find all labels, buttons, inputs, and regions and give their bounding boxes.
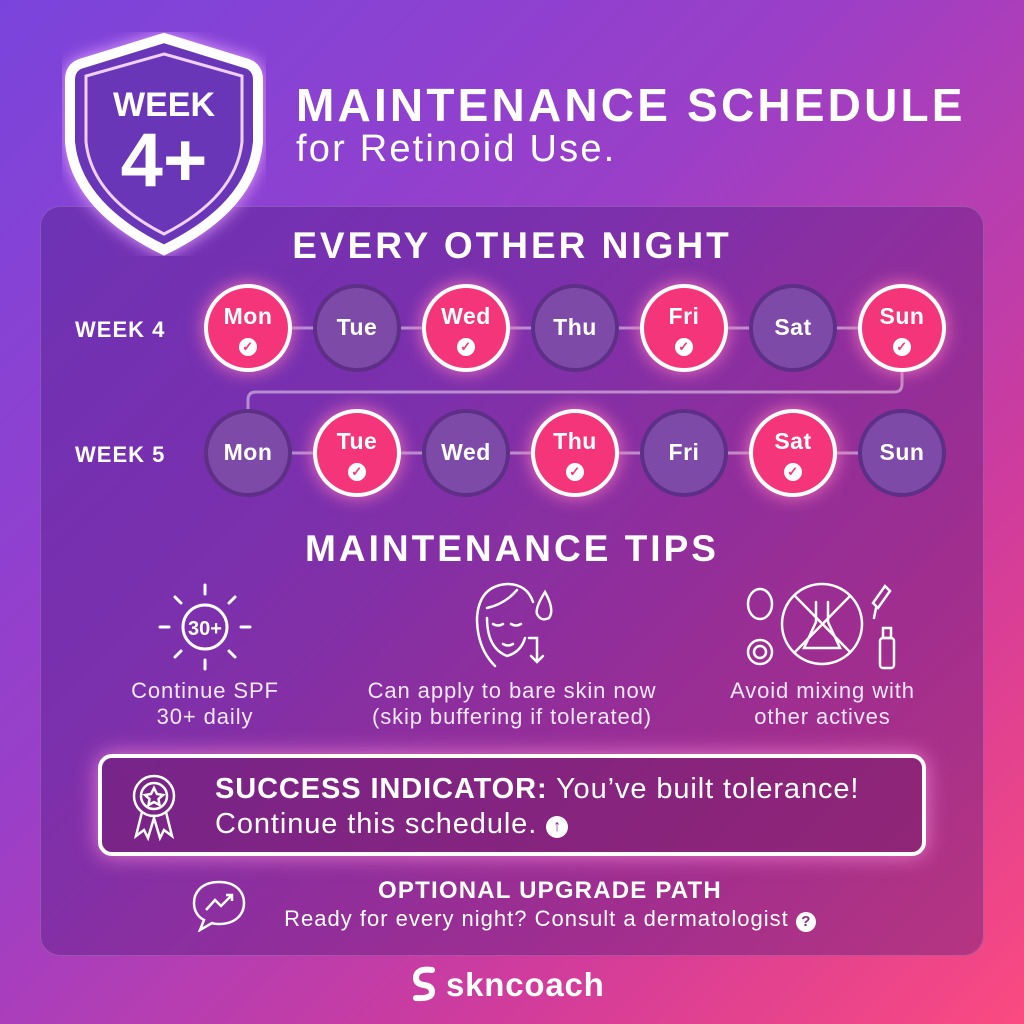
- week 4 row: ✓: [896, 339, 908, 354]
- success text: ↑: [553, 818, 561, 835]
- shield badge: 4+: [121, 118, 207, 203]
- tip text: avoid mixing: Avoid mixing with: [730, 678, 915, 703]
- week 4 row: WEEK 4: [75, 317, 165, 342]
- shield badge: WEEK: [113, 86, 215, 124]
- heading: maintenance tips: MAINTENANCE TIPS: [305, 528, 719, 569]
- week 5 row: Tue: [337, 428, 377, 454]
- week 4 row: ✓: [242, 339, 254, 354]
- success indicator box: [98, 754, 926, 856]
- tip text: bare skin: [368, 678, 656, 729]
- icon: no mixing: [746, 582, 896, 670]
- optional upgrade path text: [284, 877, 816, 932]
- tip text: spf: Continue SPF: [131, 678, 279, 703]
- success text: Continue this schedule.: [215, 808, 537, 840]
- shield badge: [62, 32, 266, 256]
- success text: SUCCESS INDICATOR: You’ve built tolerance!: [215, 773, 859, 805]
- tip text: avoid mixing: other actives: [754, 704, 891, 729]
- week 5 row: WEEK 5: [75, 442, 165, 467]
- week 4 row: Mon: [224, 303, 272, 329]
- icon: award ribbon: [132, 774, 176, 842]
- logo: skncoach: [446, 966, 605, 1003]
- week 4 row: ✓: [678, 339, 690, 354]
- main panel: [40, 206, 984, 956]
- week 4 row: Fri: [669, 303, 699, 329]
- week 4 row: Tue: [337, 314, 377, 340]
- heading: every other night: EVERY OTHER NIGHT: [292, 225, 732, 266]
- week 4 row: Sun: [880, 303, 924, 329]
- icon: chat trend: [192, 880, 246, 932]
- week 5 row: Sun: [880, 439, 924, 465]
- week 4 row: ✓: [460, 339, 472, 354]
- week 5 row: [75, 398, 946, 508]
- week 5 row: ✓: [569, 464, 581, 479]
- week 5 row: Wed: [441, 439, 491, 465]
- tip text: spf: [131, 678, 279, 729]
- week 5 row: Fri: [669, 439, 699, 465]
- week 4 row: Wed: [441, 303, 491, 329]
- title: MAINTENANCE SCHEDULE: [296, 79, 966, 131]
- tip text: bare skin: (skip buffering if tolerated): [372, 704, 652, 729]
- success text: [215, 773, 859, 840]
- week 5 row: ✓: [351, 464, 363, 479]
- optional upgrade path text: ?: [801, 913, 810, 930]
- tip text: bare skin: Can apply to bare skin now: [368, 678, 656, 703]
- week 5 row: Mon: [224, 439, 272, 465]
- week 5 row: Sat: [774, 428, 812, 454]
- icon: sun spf: 30+: [188, 618, 222, 640]
- tip text: avoid mixing: [730, 678, 915, 729]
- optional upgrade path text: Ready for every night? Consult a dermatologist: [284, 906, 789, 931]
- subtitle: for Retinoid Use.: [296, 128, 616, 170]
- week 4 row: Thu: [553, 314, 597, 340]
- icon: face with drop: [476, 582, 552, 668]
- icon: sun spf: [158, 584, 252, 670]
- optional upgrade path text: OPTIONAL UPGRADE PATH: [378, 877, 722, 904]
- week 4 row: [75, 272, 957, 384]
- week 4 row: Sat: [774, 314, 812, 340]
- tip text: spf: 30+ daily: [157, 704, 253, 729]
- week 5 row: ✓: [787, 464, 799, 479]
- week 5 row: Thu: [553, 428, 597, 454]
